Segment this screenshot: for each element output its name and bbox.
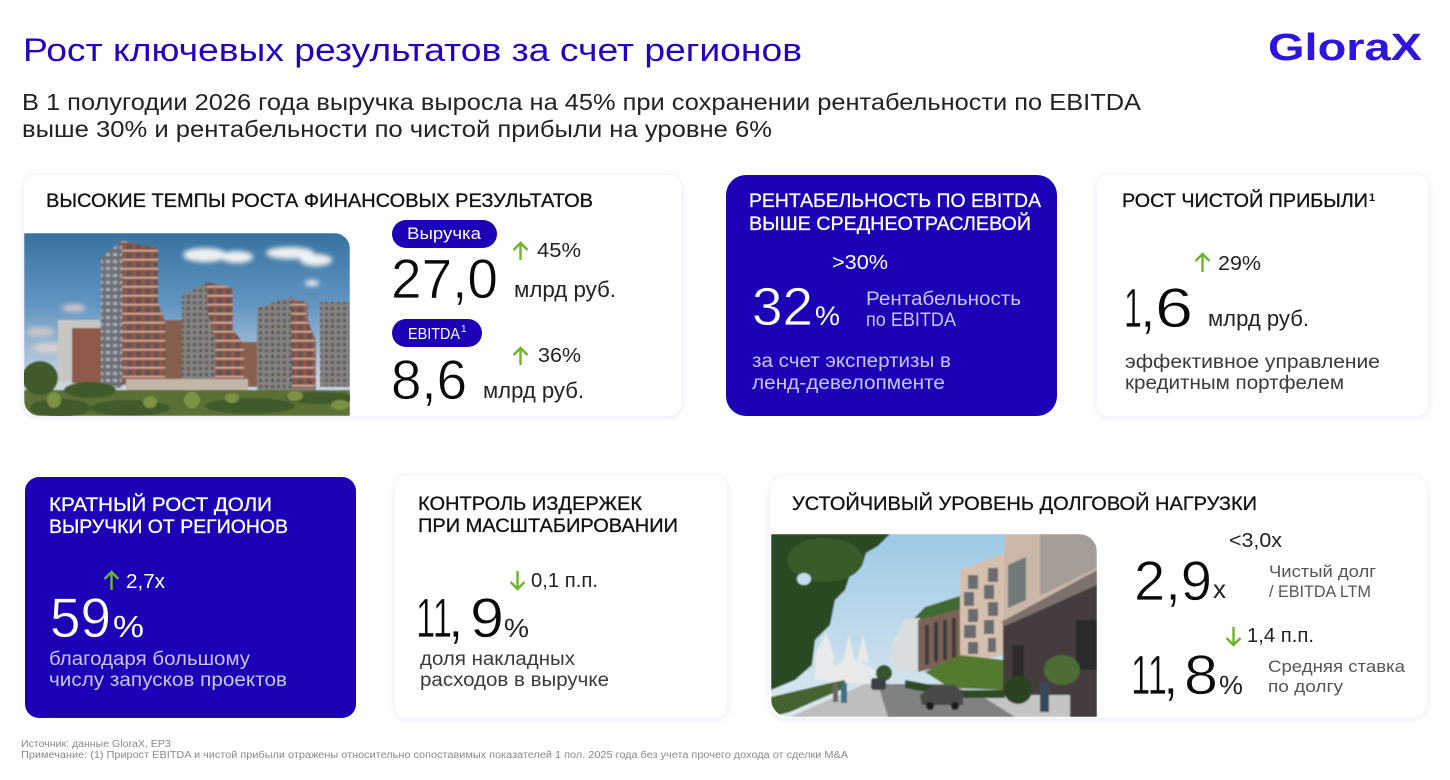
title: Рост ключевых результатов за счет регионов	[23, 32, 802, 68]
profit value: 6	[1155, 276, 1193, 339]
panel: net profit	[1097, 175, 1428, 416]
share value	[50, 586, 144, 649]
margin label: по EBITDA	[866, 310, 956, 331]
description	[420, 649, 609, 691]
tree	[771, 534, 890, 690]
photo: residential towers	[22, 233, 355, 417]
panel: cost control	[395, 476, 727, 718]
panel: EBITDA margin	[726, 175, 1057, 416]
panel heading	[749, 191, 1041, 235]
footnotes	[21, 739, 848, 761]
profit value: 1	[1124, 276, 1142, 339]
pill: revenue	[392, 220, 497, 248]
cost value: 9	[470, 586, 504, 649]
footnotes: Примечание: (1) Прирост EBITDA и чистой прибыли отражены относительно сопоставимых показателей 1 пол. 2025 года без учета прочего дохода от сделки M&A	[21, 749, 848, 761]
rate value	[1131, 643, 1243, 706]
EBITDA unit: млрд руб.	[483, 378, 584, 403]
hill and buildings	[914, 595, 961, 620]
logo: GloraX: GloraX	[1268, 27, 1423, 69]
pill: revenue: Выручка	[407, 224, 482, 243]
panel heading: ПРИ МАСШТАБИРОВАНИИ	[418, 516, 678, 537]
car	[920, 685, 963, 705]
panel heading: КРАТНЫЙ РОСТ ДОЛИ	[49, 494, 272, 516]
icon: up arrow 29%	[1196, 254, 1210, 272]
cost value	[416, 586, 529, 649]
pill: EBITDA	[392, 319, 482, 347]
leverage label: Чистый долг	[1269, 562, 1376, 581]
revenue unit: млрд руб.	[514, 277, 616, 302]
margin value: 32	[752, 277, 813, 337]
debt limit: <3,0x	[1229, 530, 1282, 552]
leverage value: x	[1213, 576, 1227, 604]
leverage label: / EBITDA LTM	[1269, 582, 1371, 601]
hedges	[771, 680, 845, 717]
rate label: по долгу	[1268, 677, 1344, 696]
EBITDA growth: 36%	[538, 345, 581, 367]
leverage value: 2,9	[1134, 549, 1212, 612]
cost value: %	[504, 613, 529, 643]
description	[752, 351, 951, 394]
share value: %	[113, 609, 144, 644]
icon: up arrow 36%	[514, 348, 528, 365]
subtitle: В 1 полугодии 2026 года выручка выросла на 45% при сохранении рентабельности по EBITDA	[22, 89, 1141, 115]
share growth: 2,7x	[126, 571, 165, 593]
profit growth: 29%	[1218, 253, 1261, 275]
description: благодаря большому	[49, 649, 251, 670]
church	[815, 632, 875, 684]
profit unit: млрд руб.	[1208, 306, 1309, 331]
subtitle: выше 30% и рентабельности по чистой прибыли на уровне 6%	[22, 116, 772, 142]
panel: regional revenue share	[25, 477, 356, 718]
description	[1125, 352, 1380, 394]
pill: EBITDA: 1	[461, 324, 467, 335]
rate value: 11	[1131, 643, 1167, 706]
rate value: 8	[1184, 643, 1218, 706]
description	[49, 649, 287, 691]
icon: up arrow 45%	[514, 243, 528, 260]
footnotes: Источник: данные GloraX, ЕРЗ	[21, 739, 171, 750]
pill: EBITDA: EBITDA	[408, 326, 460, 343]
description: числу запусков проектов	[49, 670, 287, 691]
margin value	[752, 277, 840, 337]
benchmark: >30%	[832, 252, 888, 274]
panel heading: РЕНТАБЕЛЬНОСТЬ ПО EBITDA	[749, 191, 1041, 212]
revenue growth: 45%	[537, 240, 581, 262]
panel heading	[418, 494, 678, 537]
description: эффективное управление	[1125, 352, 1380, 373]
icon: down arrow 1,4 п.п.	[1226, 627, 1240, 645]
description: за счет экспертизы в	[752, 351, 951, 372]
margin value: %	[815, 301, 840, 331]
panel heading: УСТОЙЧИВЫЙ УРОВЕНЬ ДОЛГОВОЙ НАГРУЗКИ	[792, 493, 1257, 515]
description: ленд-девелопменте	[752, 373, 945, 394]
rate label	[1268, 657, 1406, 696]
revenue value: 27,0	[391, 247, 498, 310]
panel heading: ВЫРУЧКИ ОТ РЕГИОНОВ	[49, 517, 288, 538]
panel heading	[49, 494, 288, 538]
road	[878, 684, 1030, 717]
margin label: Рентабельность	[866, 289, 1021, 310]
profit value: ,	[1140, 276, 1156, 339]
icon: down arrow 0,1 п.п.	[510, 571, 524, 589]
cost value: 11	[416, 586, 452, 649]
panel heading: РОСТ ЧИСТОЙ ПРИБЫЛИ	[1122, 190, 1368, 212]
margin label	[866, 289, 1021, 331]
profit value	[1124, 276, 1193, 339]
rate label: Средняя ставка	[1268, 657, 1406, 676]
cost value: ,	[448, 586, 464, 649]
EBITDA value: 8,6	[391, 348, 467, 411]
description: расходов в выручке	[420, 670, 609, 691]
icon: up arrow 2,7x	[104, 572, 118, 590]
share value: 59	[50, 586, 111, 649]
photo: street with church	[771, 534, 1097, 717]
panel heading: КОНТРОЛЬ ИЗДЕРЖЕК	[418, 494, 642, 515]
description: кредитным портфелем	[1125, 373, 1344, 394]
rate value: ,	[1163, 643, 1179, 706]
leverage label	[1269, 562, 1376, 601]
panel heading: 1	[1369, 192, 1375, 204]
panel: financial growth	[22, 175, 681, 417]
description: доля накладных	[420, 649, 576, 670]
rate change: 1,4 п.п.	[1247, 625, 1314, 647]
panel heading: ВЫСОКИЕ ТЕМПЫ РОСТА ФИНАНСОВЫХ РЕЗУЛЬТАТОВ	[46, 191, 593, 212]
panel: debt load	[770, 476, 1427, 718]
subtitle	[22, 89, 1141, 142]
cost change: 0,1 п.п.	[531, 570, 598, 592]
people	[833, 684, 838, 702]
panel heading: ВЫШЕ СРЕДНЕОТРАСЛЕВОЙ	[749, 213, 1031, 235]
rate value: %	[1219, 670, 1243, 700]
